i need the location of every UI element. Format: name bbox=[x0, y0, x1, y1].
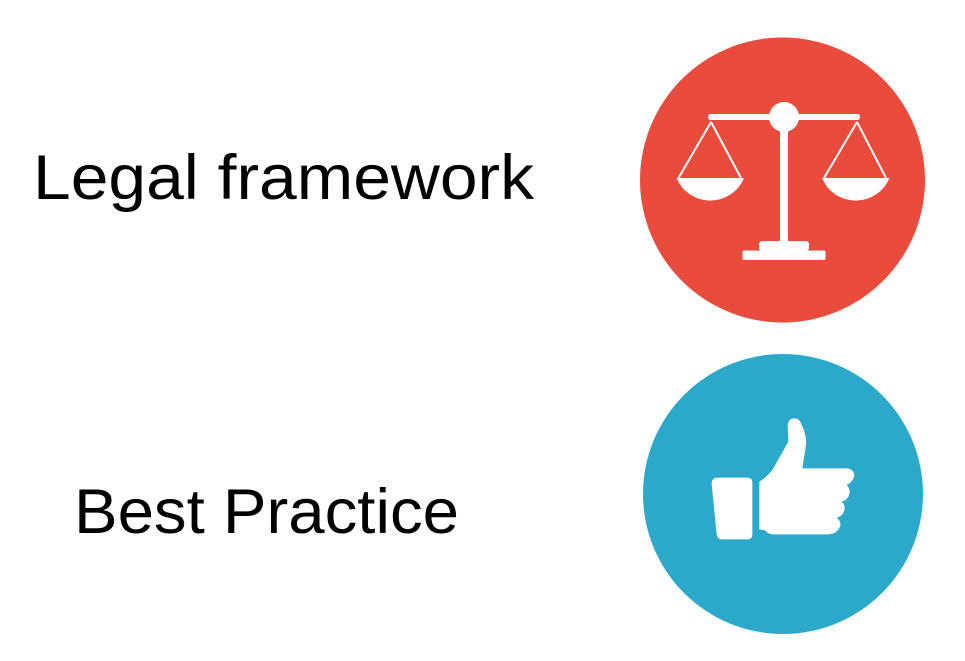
icon: thumbs up on blue circle bbox=[643, 354, 923, 634]
heading: Best Practice: Best Practice bbox=[74, 477, 459, 547]
heading: Legal framework: Legal framework bbox=[33, 143, 535, 213]
icon: scales of justice on red circle bbox=[640, 38, 925, 322]
